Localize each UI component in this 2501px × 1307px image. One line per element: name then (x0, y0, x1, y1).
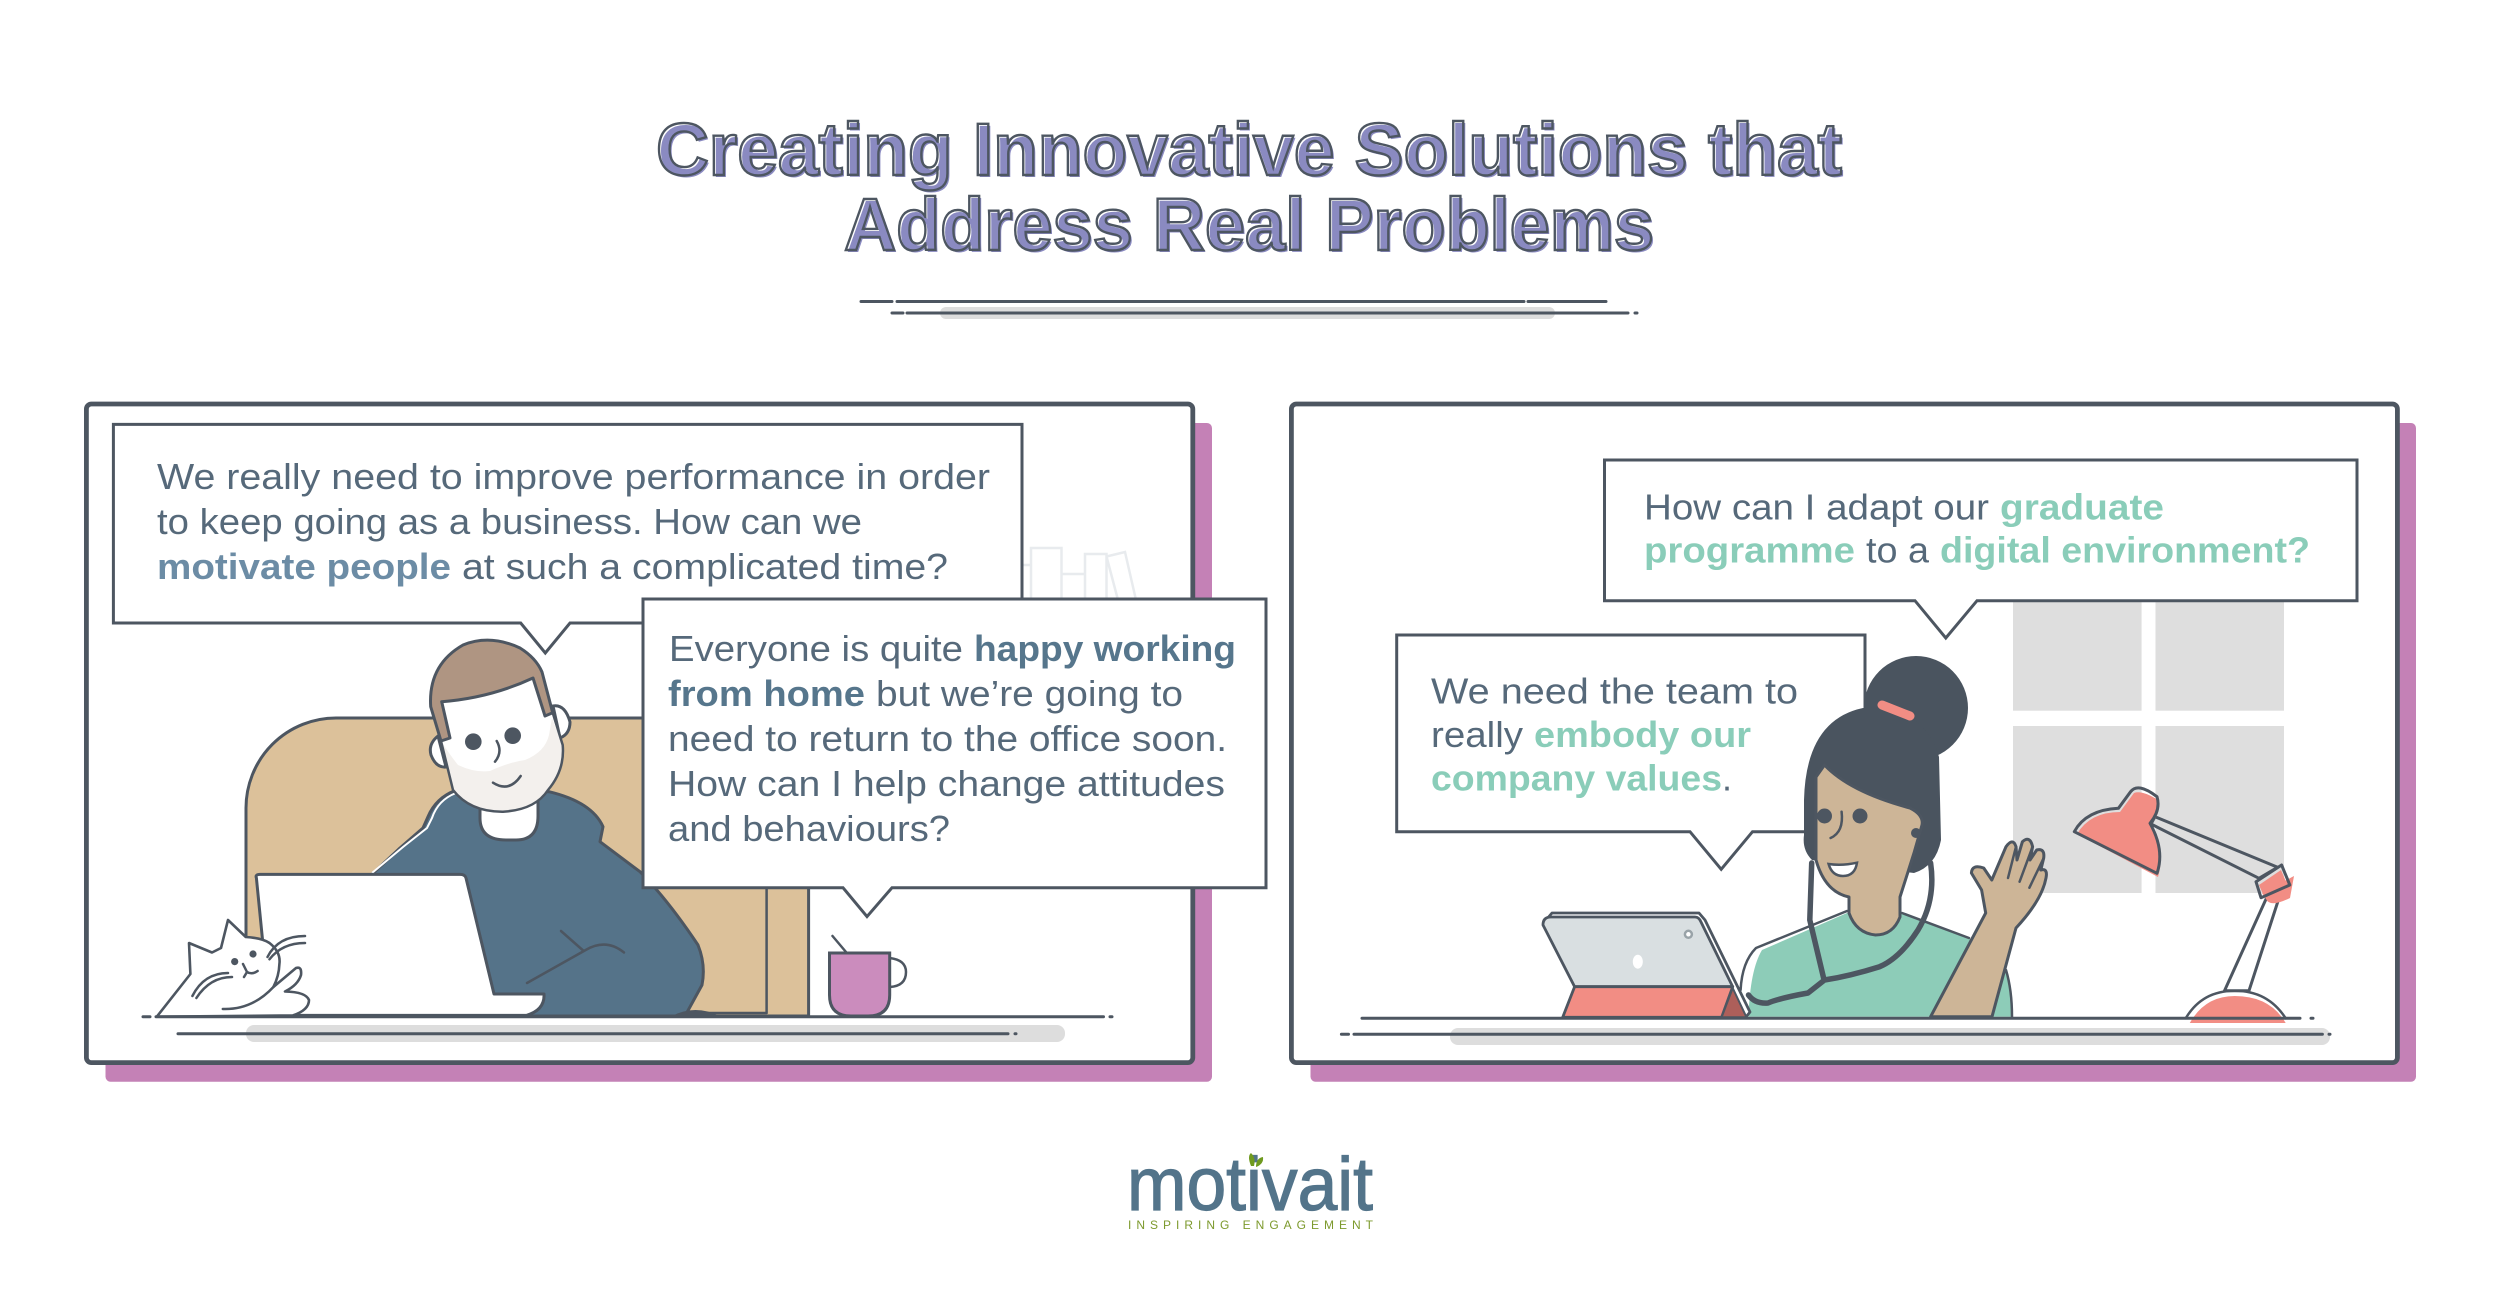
nose (1831, 812, 1842, 838)
cushion bump (672, 1010, 720, 1016)
shirt (1748, 913, 2012, 1017)
beard (441, 718, 563, 812)
speech bubble: graduate programme: graduate (2000, 486, 2164, 528)
speech bubble: happy working from home: from home (668, 673, 865, 714)
face (441, 678, 563, 812)
floor lines (1341, 1018, 2330, 1045)
title: Address Real Problems (844, 183, 1654, 266)
logo leaves (1249, 1153, 1263, 1167)
title: Creating Innovative Solutions that (658, 110, 1844, 193)
speech bubble: happy working from home: Everyone is quite (669, 628, 963, 669)
speech bubble: company values: really (1431, 714, 1523, 755)
eyes (465, 733, 482, 750)
base (2190, 996, 2286, 1023)
card frame (1291, 404, 2397, 1063)
speech bubble: graduate programme: digital environment? (1940, 530, 2310, 570)
sofa (246, 718, 809, 1016)
arm and hand (1931, 839, 2046, 1017)
ears (430, 736, 446, 767)
speech bubble: motivate people (113, 424, 1022, 653)
shade (2077, 792, 2161, 877)
speech bubble: motivate people: motivate people (157, 546, 451, 587)
icon: desk lamp (2074, 788, 2294, 1023)
hair bun (1864, 656, 1968, 760)
lower arm (2224, 890, 2282, 991)
joint (2262, 876, 2294, 903)
panel: left scene (86, 404, 1266, 1082)
purple shadow (106, 423, 1212, 1082)
title: Address Real Problems (846, 185, 1656, 268)
neck (480, 798, 538, 840)
man working from home (368, 640, 720, 1016)
logo tagline: INSPIRING ENGAGEMENT (1128, 1218, 1374, 1232)
panel: right scene (1291, 404, 2416, 1082)
speech bubble: motivate people: at such a complicated time? (462, 546, 948, 587)
face and neck (1816, 765, 1922, 935)
title: Creating Innovative Solutions that (656, 108, 1842, 191)
ear (1911, 828, 1921, 838)
speech bubble: company values: company values (1431, 758, 1722, 798)
purple shadow (1310, 423, 2416, 1082)
woman waving (1741, 656, 2046, 1017)
speech bubble: motivate people: We really need to improve performance in order (157, 456, 990, 497)
speech bubble: graduate programme: programme (1644, 530, 1855, 570)
speech bubble: happy working from home: and behaviours? (668, 808, 950, 849)
laptop (256, 874, 544, 1015)
speech bubble: company values: . (1722, 758, 1732, 798)
title (656, 108, 1844, 268)
body (368, 791, 703, 1016)
speech bubble: motivate people: to keep going as a business. How can we (157, 501, 862, 542)
icon: tablet (1543, 913, 1750, 1017)
icon: mug (830, 936, 906, 1016)
speech bubble: happy working from home: need to return to the office soon. (668, 718, 1227, 759)
speech bubble: company values: embody our (1534, 714, 1751, 755)
speech bubble: graduate programme: How can I adapt our (1644, 486, 1989, 528)
card frame (86, 404, 1193, 1063)
speech bubble: company values (1397, 635, 1865, 869)
arm folds (527, 931, 624, 983)
speech bubble: happy working from home: but we’re going to (876, 673, 1183, 714)
logo wordmark: motivait (1127, 1142, 1373, 1226)
hair strands (1748, 863, 1932, 1003)
icon: cat (157, 920, 309, 1017)
upper arm (2151, 817, 2278, 878)
logo (1127, 1142, 1374, 1232)
speech bubble: graduate programme (1604, 460, 2357, 638)
speech bubble: graduate programme: to a (1866, 530, 1930, 570)
speech bubble: happy working from home: happy working (974, 628, 1236, 669)
eyes (1817, 808, 1832, 824)
title underline (861, 302, 1637, 319)
mouth (1829, 863, 1857, 876)
floor lines (143, 1017, 1112, 1042)
icon: books on shelf (1023, 548, 1136, 600)
window (2013, 600, 2284, 893)
hair clip (1882, 705, 1910, 716)
nose and smile (493, 741, 521, 787)
shoulder highlight (372, 793, 456, 873)
hair (431, 640, 553, 741)
hair back (1804, 708, 1941, 873)
speech bubble: happy working from home (643, 599, 1266, 917)
speech bubble: company values: We need the team to (1431, 670, 1798, 712)
speech bubble: happy working from home: How can I help change attitudes (668, 763, 1225, 804)
